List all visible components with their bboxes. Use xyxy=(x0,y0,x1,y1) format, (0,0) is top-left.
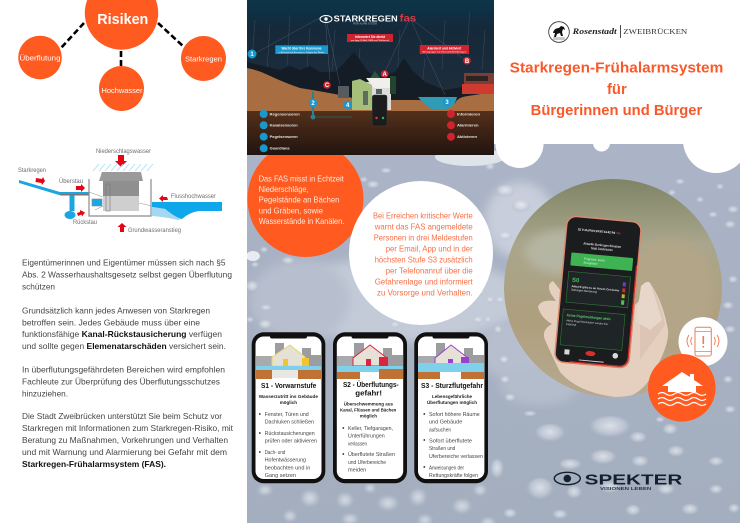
illustration S1 xyxy=(256,343,321,379)
flood causes diagram: Rückstau xyxy=(73,219,98,226)
phone: S2 Überflutungsgefahr: meiden xyxy=(348,468,366,474)
label boxes xyxy=(275,34,469,54)
callout: orange circle measurement: Niederschläge, xyxy=(259,185,309,194)
callout: orange circle measurement: Wasserstände in Kanälen. xyxy=(259,217,344,226)
flood causes diagram: Grundwasseranstieg xyxy=(128,227,182,234)
app phone: Keine Pegelmeldungen aktiv xyxy=(567,313,611,321)
label boxes: Wacht über Ihre Kommune xyxy=(282,47,322,51)
title: Starkregen-Frühalarmsystem xyxy=(510,60,723,76)
phone: S1 Vorwarnstufe: prüfen oder aktivieren xyxy=(265,439,317,445)
text block: left column: betroffen sein. Jedes Gebäude muss über eine xyxy=(22,318,201,327)
flood causes diagram xyxy=(18,148,222,234)
legend: Regensensoren xyxy=(270,112,300,116)
phone: S3 Sturzflutgefahr: aufsuchen xyxy=(429,427,451,433)
legend: Pegelsensoren xyxy=(270,135,298,139)
text block: left column: Grundsätzlich kann jedes Anwesen von Starkregen xyxy=(22,307,210,316)
title: für xyxy=(607,82,627,98)
text block: left column: und sollte gegen Elemenatarschäden versichert sein. xyxy=(22,342,226,351)
flood causes diagram: Überstau xyxy=(59,178,84,185)
phone: S1 Vorwarnstufe: möglich xyxy=(280,400,297,406)
legend: Aktivieren xyxy=(457,135,478,139)
callout: white circle warning: per Email, App und in der xyxy=(386,245,473,254)
phone: S2 Überflutungsgefahr: Unterführungen xyxy=(348,434,385,440)
markers on map: 1 xyxy=(250,52,254,58)
app phone: angezeigt xyxy=(566,322,576,327)
app phone: Prognose: keine xyxy=(584,257,605,263)
label boxes: Informiert Sie direkt xyxy=(355,35,386,39)
phone: S2 Überflutungsgefahr: S2 - Überflutungs- xyxy=(343,380,399,389)
background: water droplets xyxy=(245,0,740,523)
callout: white circle warning: Personen in drei Meldestufen xyxy=(374,233,473,242)
panel: FAS system illustration xyxy=(247,0,494,155)
text block: left column: Die Stadt Zweibrücken unterstützt Sie beim Schutz vor xyxy=(22,412,222,421)
markers on map xyxy=(248,50,471,109)
risk diagram xyxy=(18,0,226,111)
icon: flooded house xyxy=(648,354,716,422)
markers on map: 3 xyxy=(445,100,449,106)
phone: S2 Überflutungsgefahr: Kanal, Flüssen und Bächen xyxy=(340,408,396,414)
app phone: Ereignisse xyxy=(583,261,598,266)
callout: white circle warning: per Telefonanruf über die xyxy=(386,267,473,276)
photo: hand holding app phone xyxy=(504,179,722,398)
illustration S2 xyxy=(337,343,403,379)
fire station xyxy=(462,73,494,94)
app phone: Starkregen-Alarmierung xyxy=(571,288,598,294)
text block: left column: Abs. 2 Wasserhaushaltsgesetz selbst gegen Überflutung xyxy=(22,270,232,280)
callout: white circle warning xyxy=(349,181,493,325)
markers on map: C xyxy=(325,83,330,89)
logo: Rosenstadt Zweibrücken xyxy=(549,22,687,42)
icon: vibrating phone xyxy=(678,317,728,366)
phone: S1 Vorwarnstufe: beobachten und in xyxy=(265,465,310,471)
legend: Alarmieren xyxy=(457,124,479,128)
panel: left white column xyxy=(0,0,247,523)
phone: S3 Sturzflutgefahr: Straßen und xyxy=(429,446,455,452)
phone: S1 Vorwarnstufe: Gang setzen xyxy=(265,473,296,479)
phone: S1 Vorwarnstufe: Rückstausicherungen xyxy=(265,431,315,437)
phone: S2 Überflutungsgefahr: und Uferbereiche xyxy=(348,460,386,466)
logo: Rosenstadt Zweibrücken: ZWEIBRÜCKEN xyxy=(623,29,687,36)
app phone: fas xyxy=(616,231,621,235)
text block: left column: Beratung zu Maßnahmen, Vorkehrungen und Verhalten xyxy=(22,436,228,445)
phone: S2 Überflutungsgefahr: möglich xyxy=(360,414,377,420)
FAS logo: STARKREGEN xyxy=(334,14,398,24)
text block: left column xyxy=(22,258,234,469)
phone: S1 Vorwarnstufe: Wasserzutritt ins Gebäude xyxy=(259,394,318,400)
phone: S1 Vorwarnstufe: Fenster, Türen und xyxy=(265,412,309,418)
phone: S1 Vorwarnstufe: S1 - Vorwarnstufe xyxy=(261,381,316,390)
callout: white circle warning: Bei Erreichen kritischer Werte xyxy=(373,211,473,220)
callout: orange circle measurement: Pegelstände an Bächen xyxy=(259,196,339,205)
label boxes: Alarmiert und Aktiviert xyxy=(427,46,462,50)
phone: S2 Überflutungsgefahr: Überschwemmung aus xyxy=(344,400,393,408)
text block: left column: Fachleute zur Überprüfung des Überflutungsschutzes xyxy=(22,377,220,386)
phone: S2 Überflutungsgefahr xyxy=(333,332,407,483)
text block: left column: Starkregen mit Informationen zum Starkregen-Risiko, mit xyxy=(22,424,234,433)
phone: S3 Sturzflutgefahr: Anweisungen der xyxy=(429,466,464,472)
app phone: STARKREGEN xyxy=(577,227,616,235)
phone: S2 Überflutungsgefahr: Überflutete Straßen xyxy=(348,451,395,458)
illustration S3 xyxy=(418,343,484,379)
title: Bürgerinnen und Bürger xyxy=(531,103,703,119)
app phone: Stadt Zweibrücken xyxy=(591,246,613,252)
markers on map: B xyxy=(465,59,470,65)
callout: white circle warning: warnt das FAS angemeldete xyxy=(374,222,473,231)
phone: S3 Sturzflutgefahr: S3 - Sturzflutgefahr xyxy=(421,381,483,390)
text block: left column: Starkregen-Frühalarmsystem (FAS). xyxy=(22,460,166,469)
text block: left column: funktionsfähige Kanal-Rückstausicherung verfügen xyxy=(22,330,222,339)
risk diagram: Risiken xyxy=(97,11,148,28)
text block: left column: In überflutungsgefährdeten Bereichen wird empfohlen xyxy=(22,365,225,374)
logo: Spekter: VISIONEN LEBEN xyxy=(600,486,651,491)
phone: S1 Vorwarnstufe: Hofentwässerung xyxy=(265,458,306,464)
flood causes diagram: Starkregen xyxy=(18,167,47,174)
flood causes diagram: Niederschlagswasser xyxy=(96,148,151,155)
markers on map: 2 xyxy=(311,101,315,107)
FAS logo: fas xyxy=(400,14,417,24)
callout: orange circle measurement: Das FAS misst in Echtzeit xyxy=(259,174,344,183)
thumb xyxy=(636,282,662,330)
phone: S3 Sturzflutgefahr: Überflutungen möglich xyxy=(427,399,477,406)
phone: S3 Sturzflutgefahr xyxy=(414,332,488,483)
legend: Guardians xyxy=(270,147,290,151)
label boxes: Warngruppe wie Einsatzkräfte/Anlagen xyxy=(422,51,467,54)
app phone: S0 xyxy=(572,278,580,284)
callout: white circle warning: höchsten Stufe S3 zusätzlich xyxy=(375,256,473,265)
text block: left column: Eigentümerinnen und Eigentümer müssen sich nach §5 xyxy=(22,258,226,267)
phone: S1 Vorwarnstufe: Dach- und xyxy=(265,450,285,456)
phone: S2 Überflutungsgefahr: Keller, Tiefgaragen, xyxy=(348,426,393,432)
legend: Informieren xyxy=(457,112,481,116)
phone: S1 Vorwarnstufe xyxy=(252,332,325,483)
app phone: Aktuelle Starkregen-Situation xyxy=(583,241,621,249)
callout: white circle warning: zu Vorsorge und Verhalten. xyxy=(377,289,473,298)
phone: S3 Sturzflutgefahr: Rettungskräfte folgen xyxy=(429,473,478,479)
panel: right header with cloud edge xyxy=(494,0,740,173)
logo: Spekter xyxy=(554,471,683,491)
water channel xyxy=(418,97,457,110)
hand xyxy=(538,281,668,398)
markers on map: 4 xyxy=(346,103,350,109)
label boxes: per App, E-Mail, SMS und Telefonruf xyxy=(351,39,389,42)
phone: S2 Überflutungsgefahr: gefahr! xyxy=(355,388,382,398)
phone: S3 Sturzflutgefahr: und Gebäude xyxy=(429,420,462,426)
legend xyxy=(260,110,481,152)
app phone: Aktuell gibt es an Ihrem Ort keine xyxy=(571,284,620,292)
callout: white circle warning: Gefahrenlage und informiert xyxy=(375,278,473,287)
ground xyxy=(247,68,494,115)
FAS logo xyxy=(320,14,416,24)
legend: Kanalsensoren xyxy=(270,124,298,128)
logo: Rosenstadt Zweibrücken: Rosenstadt xyxy=(571,27,618,36)
handset xyxy=(372,95,387,126)
markers on map: A xyxy=(383,72,388,78)
text block: left column: hinzuziehen. xyxy=(22,389,68,398)
house xyxy=(338,71,396,110)
logo: Spekter: SPEKTER xyxy=(585,471,683,488)
label boxes: in Echtzeit mit Sensoren + Folgen der Wetter xyxy=(278,51,325,54)
title xyxy=(510,60,723,119)
risk diagram: Überflutung xyxy=(20,54,60,62)
text block: left column: schützen xyxy=(22,283,55,292)
phone: S1 Vorwarnstufe: Dachluken schließen xyxy=(265,420,314,426)
phone: S2 Überflutungsgefahr: verlassen xyxy=(348,441,367,447)
phone: S3 Sturzflutgefahr: Sofort überflutete xyxy=(429,438,472,444)
app phone: Aktive Pegel-Warnstufen werden hier xyxy=(566,318,608,326)
phone: S3 Sturzflutgefahr: Lebensgefährliche xyxy=(432,394,472,400)
risk diagram: Hochwasser xyxy=(102,86,143,95)
app phone xyxy=(553,215,643,369)
callout: orange circle measurement xyxy=(248,141,364,257)
risk diagram: Starkregen xyxy=(185,54,222,64)
FAS logo: FRÜH ALARM SYSTEM xyxy=(353,22,377,26)
flood causes diagram: Flusshochwasser xyxy=(171,193,216,200)
phone: S3 Sturzflutgefahr: Sofort höhere Räume xyxy=(429,412,480,418)
text block: left column: und mit Warnung und Alarmierung bei Gefahr mit dem xyxy=(22,448,227,457)
callout: orange circle measurement: und Gräben, sowie xyxy=(259,206,323,215)
phone: S3 Sturzflutgefahr: Uferbereiche verlassen xyxy=(429,454,483,460)
